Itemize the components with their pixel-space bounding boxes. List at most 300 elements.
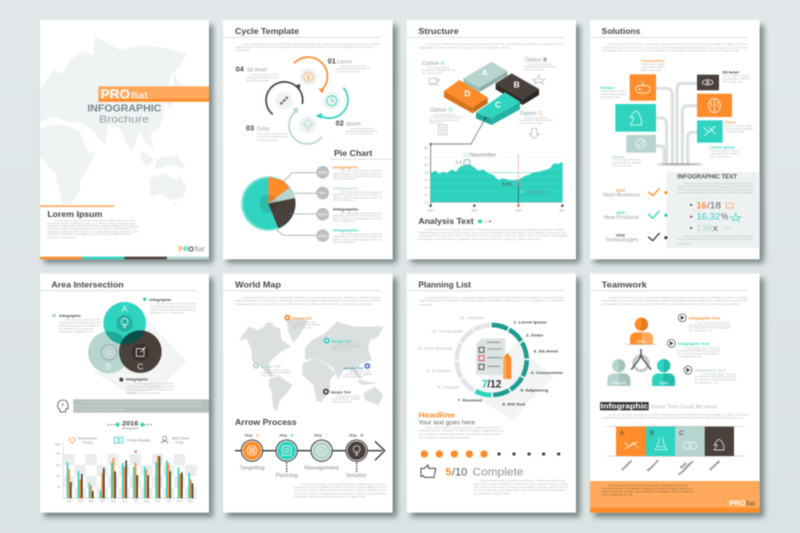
arrow process: Management (304, 465, 339, 471)
venn diagram: A (122, 304, 128, 314)
venn labels: eiusmod tempor incididunt ut (150, 308, 196, 312)
cover text block: occaecat cupidatat non proident sunt in culpa qui officia deserunt (47, 232, 133, 236)
panel: planning list (407, 273, 576, 513)
cycle labels: Lorem ipsum dolor sit amet (340, 64, 367, 68)
cycle labels: Sit Amet (247, 67, 267, 73)
bar chart: Sep (156, 499, 161, 503)
pie legends: adipiscing elit sed do eiusmod tempor ut (333, 193, 382, 197)
solution labels: elit sed do (600, 95, 621, 99)
cover logo: P (178, 247, 183, 254)
area chart: 0.3 (425, 185, 429, 189)
ring labels: 4. Consectetur (531, 370, 564, 375)
solution labels: consectetur adipis (722, 77, 750, 81)
team callouts (667, 314, 737, 385)
info panel text: tempor incididunt ut labore et dolore magna aliqua ut enim ad minim (677, 185, 754, 189)
option labels: consectetur adipiscing elit (429, 115, 462, 119)
map markers: consectetur adipis (331, 397, 361, 401)
panel: world map and arrow process (223, 273, 393, 513)
connector line (430, 117, 486, 206)
cover text block: mollit anim id est laborum (47, 235, 76, 239)
infographic heading: Some Text Could Be Here (651, 405, 717, 411)
timeline (603, 188, 669, 244)
team callouts: Infographic Text (694, 368, 726, 373)
intro text: magna aliqua ut enim ad minim veniam quis nostrud exercitation ullamco laboris nisi ut aliquip ex ea commodo (418, 299, 565, 303)
stats: 136 (696, 223, 712, 233)
bar chart: Nov (177, 499, 183, 503)
area chart: 1.0 (425, 155, 429, 159)
infographic heading (600, 402, 717, 411)
grey text band: Lorem ipsum dolor sit amet consectetur adipiscing elit sed do eiusmod tempor incididunt ut labore (82, 400, 202, 404)
grey text band: et dolore magna aliqua ut enim ad minim veniam quis nostrud exercitation ullamco laboris nisi ut aliquip (75, 403, 202, 407)
solution labels: Lorem ipsum dolor (641, 62, 665, 66)
ring labels: 11. Consequat (432, 329, 463, 334)
info panel text: commodo consequat duis aute irure dolor in reprehenderit in voluptate (677, 191, 754, 195)
complete text block: eiusmod tempor incididunt ut labore et dolore magna aliqua ut enim (474, 482, 569, 486)
tabs: D (708, 430, 713, 437)
bar chart: May (111, 499, 117, 503)
heading: structure: Structure (418, 26, 459, 36)
cycle labels: Dolor (257, 127, 270, 133)
pie legends: labore et dolore magna aliqua ut enim ad (333, 216, 382, 220)
arrow process: Planning (276, 473, 298, 479)
solution labels: elit sed do (710, 155, 731, 159)
bar chart: Feb (78, 499, 83, 503)
area chart: 0.4 (425, 178, 429, 182)
infographic text: Lorem ipsum dolor sit amet consectetur adipiscing elit sed do eiusmod tempor incididunt ut labore et dolore (608, 412, 748, 416)
team callouts: Lorem ipsum dolor sit amet (701, 372, 736, 376)
connector pipes (656, 83, 697, 164)
ring labels (417, 315, 564, 406)
cycle diagram (266, 57, 348, 144)
heading: arrow process: Arrow Process (235, 417, 297, 427)
orange footer: Lorem ipsum dolor sit amet consectetur adipiscing elit sed do (608, 483, 689, 487)
venn diagram: C (137, 361, 143, 371)
cycle labels: do eiusmod tempor ut (346, 132, 373, 136)
bar chart: 100 (56, 474, 61, 478)
headline block: Headline (418, 411, 455, 420)
rotated tab labels: Research (646, 459, 660, 472)
cover logo: flat (194, 247, 204, 254)
cycle labels: 03 (246, 124, 254, 133)
pie legends: adipiscing elit sed do eiusmod tempor ut (333, 235, 382, 239)
chart legend: Group (83, 441, 93, 445)
stats: </> (722, 226, 731, 232)
isometric blocks: A (482, 68, 489, 78)
bar chart: Mar (89, 499, 94, 503)
chart legend: SmartHeart (78, 437, 97, 441)
tabs: A (620, 430, 625, 437)
intro text: Lorem ipsum dolor sit amet consectetur adipiscing elit sed do eiusmod tempor incididunt ut labore et dolore (425, 42, 565, 46)
analysis text block: Lorem ipsum dolor sit amet consectetur adipiscing elit sed do eiusmod tempor incididunt ut labore et dolore (425, 228, 565, 232)
rotated tab labels: Best (679, 461, 688, 469)
venn labels: ut labore et dolore (59, 327, 95, 331)
map markers: elit sed do (343, 375, 364, 379)
venn labels: Lorem ipsum dolor sit amet (156, 302, 196, 306)
solution labels: elit sed do (722, 80, 743, 84)
ring long shadow (473, 342, 553, 422)
timeline: 2014 (616, 188, 626, 193)
pie legends: Infographic (333, 165, 358, 169)
heading: world map: World Map (235, 280, 281, 290)
intro text: consequat duis aute irure dolor in reprehenderit in voluptate velit esse cillum dolore eu fugiat nulla (602, 302, 739, 306)
cycle labels: do eiusmod tempor (257, 138, 278, 142)
venn labels: Infographic (59, 314, 81, 318)
chart legend (69, 436, 189, 445)
solution labels: Consectetur (641, 59, 666, 63)
headline block: nisi ut aliquip ex ea commodo consequat (418, 435, 470, 439)
map markers: Sample Text (261, 365, 281, 369)
progress value: /12 (487, 378, 501, 390)
panel: teamwork (590, 273, 760, 513)
pie legends: minim veniam quis (333, 219, 355, 223)
map markers: consectetur adipis (292, 323, 321, 327)
process text block: Lorem ipsum dolor sit amet consectetur adipiscing elit sed do (301, 482, 386, 486)
pie legends: Lorem ipsum dolor sit amet consectetur (340, 232, 382, 236)
pie legends: Lorem ipsum dolor sit amet consectetur (340, 169, 382, 173)
process text block: ex ea commodo consequat duis aute irure dolor in reprehenderit (294, 491, 387, 495)
venn labels: magna aliqua ut (59, 330, 93, 334)
cover world map (40, 37, 187, 207)
area chart: 1.1 (455, 159, 462, 164)
map markers (253, 315, 373, 403)
ring labels: 9. Et Dolore (427, 368, 452, 373)
pie legends: Lorem ipsum dolor sit amet consectetur (340, 211, 382, 215)
pie connectors (277, 173, 317, 235)
team callouts: consectetur adipiscing elit sed (694, 375, 737, 379)
solution labels: Lorem ipsum dolor (725, 124, 753, 128)
area chart: 1k (424, 146, 428, 150)
arrow process: B (291, 434, 294, 438)
map markers: Sample Text (343, 366, 364, 370)
ring labels: 3. Sit Amet (533, 349, 559, 354)
intro text: Lorem ipsum dolor sit amet consectetur adipiscing elit sed do eiusmod tempor incididunt ut labore et dolore (608, 42, 748, 46)
solution labels: consectetur adipis (725, 127, 754, 131)
heading: pie chart: Pie Chart (334, 149, 373, 158)
rotated tab labels: Possibilities (678, 460, 694, 476)
ring labels: 7. Eiusmod (458, 398, 483, 403)
bar chart: 50 (57, 485, 61, 489)
timeline: 2015 (616, 210, 626, 215)
process text block: ad minim veniam quis nostrud exercitation ullamco laboris nisi ut (294, 488, 387, 492)
option labels: Lorem ipsum dolor sit (528, 62, 552, 66)
cycle labels: 02 (336, 118, 344, 127)
arrow process: Step (279, 434, 288, 438)
map markers: elit sed do (331, 399, 352, 403)
intro text: Lorem ipsum dolor sit amet consectetur adipiscing elit sed do eiusmod tempor incididunt ut labore et dolore (242, 295, 381, 299)
pie legends: minim veniam quis (333, 198, 355, 202)
progress ring (457, 325, 527, 395)
ring labels: 1. Lorem Ipsum (513, 320, 547, 325)
pie legends: adipiscing elit sed do eiusmod tempor ut (333, 171, 382, 175)
stats: /18 (707, 200, 721, 210)
team callouts: do eiusmod tempor incididunt (694, 378, 736, 382)
cover text block: Lorem Ipsum (47, 210, 102, 219)
rotated tab labels: Analysis (620, 459, 633, 472)
map markers: elit sed do (331, 347, 352, 351)
map markers: Lorem ipsum dolor (336, 394, 360, 398)
cycle diagram: $ (307, 75, 311, 81)
tabs: C (679, 430, 684, 437)
map markers: consectetur adipis (261, 371, 291, 375)
complete text block: ad minim veniam quis nostrud exercitation ullamco laboris nisi ut (474, 485, 569, 489)
isometric blocks (444, 62, 539, 125)
icon: thumbs up (421, 465, 436, 477)
option labels: do eiusmod (422, 71, 442, 75)
arrow process: Step (349, 434, 358, 438)
intro text (602, 42, 748, 53)
solution labels (600, 59, 754, 168)
orange footer: flat (746, 500, 755, 507)
orange footer: PRO (729, 500, 746, 507)
venn labels: Infographic (126, 378, 148, 382)
venn labels: consectetur adipiscing elit sed (127, 384, 174, 388)
area chart: 2017 (559, 208, 566, 212)
cycle labels: Lorem (337, 59, 353, 65)
pie legends: minim veniam quis (333, 240, 355, 244)
intro text (602, 295, 748, 306)
stats (690, 200, 741, 233)
rotated tab labels (620, 457, 721, 476)
cover logo: R (183, 247, 188, 254)
solution labels: Tempor (600, 86, 616, 90)
intro text: magna aliqua ut enim ad minim veniam quis nostrud exercitation ullamco laboris nisi ut aliquip ex ea commodo (602, 299, 748, 303)
icon: head with question mark (58, 400, 68, 412)
cover colour strip (40, 257, 209, 259)
cover title: Brochure (99, 115, 149, 126)
pie value badges: 30% (318, 170, 327, 175)
pie legends (333, 165, 382, 244)
venn labels: eiusmod tempor incididunt ut (127, 387, 174, 391)
orange title band (98, 86, 209, 102)
info panel text: Lorem ipsum dolor sit amet consectetur adipiscing elit sed do eiusmod (683, 182, 754, 186)
area chart: January (526, 189, 547, 194)
venn labels: labore et dolore (150, 311, 184, 315)
cover text block: Lorem ipsum dolor sit amet consectetur adipiscing elit sed do (55, 219, 136, 223)
pie legends: labore et dolore magna aliqua ut enim ad (333, 237, 382, 241)
rotated tab labels: Strategy (708, 459, 721, 471)
process text block (294, 482, 388, 499)
option labels: consectetur adipiscing elit (422, 68, 455, 72)
option labels: B (543, 58, 547, 64)
complete text block: Lorem ipsum dolor sit amet consectetur adipiscing elit sed do (480, 479, 566, 483)
area chart (424, 146, 566, 212)
area chart: 0.2 (425, 193, 429, 197)
cycle labels: do eiusmod tempor (337, 69, 360, 73)
option labels: do eiusmod tempor ut (429, 118, 460, 122)
process text block: voluptate velit esse cillum dolore eu fugiat nulla (294, 495, 366, 499)
cover text block (47, 210, 139, 239)
map markers: consectetur adipis (343, 372, 373, 376)
chart legend: Best Town (172, 437, 189, 441)
cover title: PRO (101, 88, 130, 102)
headline block: Lorem ipsum dolor sit amet consectetur adipiscing elit sed do (425, 426, 502, 430)
orange footer: nisi ut aliquip ex ea (602, 493, 633, 497)
area chart: 0.8 (425, 163, 429, 167)
pie legends: adipiscing elit sed do eiusmod tempor ut (333, 214, 382, 218)
cover title: flat (131, 91, 148, 101)
stats: 16 (696, 200, 706, 210)
pie value badges (316, 166, 329, 242)
infographic text (602, 412, 748, 420)
solution labels: Aliqua (612, 155, 625, 159)
cover text block: voluptate velit esse cillum dolore eu fugiat nulla pariatur excepteur sint (47, 229, 138, 233)
solution labels: Lorem ipsum dolor (722, 74, 749, 78)
info panel text (677, 175, 754, 246)
solution labels: consectetur adipis (600, 92, 627, 96)
option labels: Lorem ipsum dolor sit (433, 112, 457, 116)
intro text (418, 42, 565, 49)
arrow process: Targeting (239, 466, 264, 472)
infographic heading: Infographic (601, 402, 649, 411)
intro text: magna aliqua ut enim ad minim veniam quis nostrud exercitation ullamco laboris nisi ut aliquip ex ea commodo (602, 45, 748, 49)
venn labels: Lorem ipsum dolor sit amet (133, 381, 174, 385)
cover title (87, 88, 161, 126)
map markers: elit sed do (292, 325, 313, 329)
cover text block: eiusmod tempor incididunt ut labore et dolore magna aliqua ut enim (47, 221, 137, 225)
map markers: Sample Text (292, 317, 313, 321)
map markers: Lorem ipsum dolor (336, 342, 361, 346)
orange footer: enim ad minim veniam quis nostrud exercitation ullamco laboris (602, 489, 694, 493)
intro text: consequat duis aute irure dolor in reprehenderit in voluptate velit esse cillum dolore eu fugiat nulla (602, 49, 739, 53)
team callouts: Infographic Text (689, 316, 721, 321)
area chart: 0.6 (425, 171, 429, 175)
timeline: New Products (604, 215, 639, 221)
intro text: Lorem ipsum dolor sit amet consectetur adipiscing elit sed do eiusmod tempor incididunt ut labore et dolore (608, 295, 748, 299)
progress dots (421, 450, 560, 458)
option labels: Option (430, 108, 447, 114)
cycle labels: 04 (236, 64, 245, 73)
complete text block (474, 479, 569, 496)
bar chart: 200 (56, 452, 61, 456)
venn labels (52, 298, 197, 395)
bar chart: 1000 (55, 442, 61, 446)
pie chart (241, 176, 296, 231)
ring labels: 12. Veniam (459, 315, 484, 320)
info panel text: veniam quis (677, 242, 691, 246)
venn labels: Lorem ipsum dolor sit amet (65, 318, 100, 322)
team callouts: Lorem ipsum dolor sit amet (684, 346, 720, 350)
solution labels: elit sed do (641, 68, 662, 72)
ring labels: 10. Quis Nostrud (417, 346, 453, 351)
option labels: Option (422, 61, 439, 67)
panel: area intersection (40, 273, 209, 513)
intro text: consequat (418, 302, 432, 306)
bar chart: Aug (144, 499, 149, 503)
bar chart: Jul (133, 499, 138, 503)
arrow process: D (361, 434, 364, 438)
area chart: November (470, 153, 497, 159)
map markers: Sample Text (331, 340, 352, 344)
venn labels: Infographic (149, 298, 171, 302)
pie value badges: 5% (319, 191, 326, 196)
bar chart: Jan (67, 499, 72, 503)
pie legends: Infographic (333, 187, 358, 191)
analysis text block: magna aliqua ut enim ad minim veniam quis nostrud exercitation ullamco laboris nisi ut aliquip ex ea commodo (418, 231, 567, 235)
isometric blocks: C (495, 99, 502, 109)
heading: teamwork: Teamwork (602, 280, 647, 290)
map markers: Lorem ipsum dolor (265, 368, 290, 372)
team callouts: consectetur adipiscing elit sed (678, 349, 720, 353)
heading: analysis text: Analysis Text (418, 216, 474, 226)
intro text: magna aliqua ut enim ad minim veniam quis nostrud exercitation ullamco (418, 45, 511, 49)
map markers: elit sed do (261, 373, 282, 377)
arrow process: Step (314, 434, 323, 438)
stats: % (721, 212, 728, 222)
intro text (235, 295, 381, 306)
cover title: INFOGRAPHIC (87, 104, 161, 115)
tabs: B (650, 430, 655, 437)
bar chart: Oct (166, 499, 171, 503)
complete text block: voluptate velit esse (474, 492, 511, 496)
bar chart: 150 (56, 463, 61, 467)
area chart: 2015 (471, 208, 478, 212)
pie legends: labore et dolore magna aliqua ut enim ad (333, 195, 382, 199)
chart legend: Photo Really (127, 439, 151, 443)
cover text block: ad minim veniam quis nostrud exercitation ullamco laboris nisi ut aliquip (47, 224, 139, 228)
solution labels: Lorem ipsum dolor (600, 89, 626, 93)
headline block: eiusmod tempor incididunt ut labore et dolore magna aliqua ut (418, 429, 504, 433)
venn labels: consectetur adipiscing elit sed do (150, 305, 197, 309)
cycle labels: consectetur adipiscing elit sed (346, 129, 378, 133)
area chart: 0.53 (502, 182, 512, 188)
cycle labels: 01 (328, 56, 336, 65)
ring labels: 8. Tempor (438, 385, 461, 390)
option labels: A (441, 61, 445, 67)
grey text band: ex ea commodo consequat duis aute (75, 407, 126, 411)
arrow process: A (256, 434, 259, 438)
report heading: Report (122, 426, 140, 431)
intro text (235, 42, 381, 52)
solution labels: elit sed do (725, 130, 746, 134)
solution labels: elit sed do (612, 164, 633, 168)
intro text: consequat duis aute irure dolor in reprehenderit in voluptate velit esse cillum dolore eu fugiat nulla (235, 302, 372, 306)
team callouts: consectetur adipiscing elit sed (689, 323, 731, 327)
analysis text block: consequat duis aute irure dolor in reprehenderit in voluptate velit esse cillum dolore eu fugiat nulla pariatur (418, 234, 568, 238)
tabs (603, 426, 747, 457)
area chart: 23 (463, 153, 469, 159)
solution labels: Lorem Ipsum (710, 145, 736, 149)
area chart: 0.1 (425, 200, 429, 204)
team callouts: do eiusmod tempor incididunt (689, 326, 731, 330)
isometric blocks: B (514, 80, 520, 90)
progress value: 7 (482, 378, 488, 390)
intro text: consequat (235, 48, 249, 52)
heading: solutions: Solutions (602, 26, 641, 36)
option labels: Option (525, 58, 542, 64)
map markers: consectetur adipis (331, 345, 362, 349)
analysis text block: excepteur sint occaecat cupidatat non proident sunt in culpa qui officia deserunt (418, 237, 542, 241)
pie value badges: 25% (318, 212, 327, 217)
team figures: Sam (659, 381, 669, 386)
cycle labels: consectetur adipiscing elit sed (246, 75, 279, 79)
venn labels: labore et dolore (127, 391, 161, 395)
arrow process (235, 434, 385, 479)
pie legends: labore et dolore magna aliqua ut enim ad (333, 174, 382, 178)
heading: cycle template: Cycle Template (235, 26, 299, 36)
progress value (482, 378, 501, 390)
solution labels: Door (725, 120, 736, 124)
cycle labels: Lorem ipsum dolor sit (350, 126, 374, 130)
analysis text block (418, 228, 568, 241)
isometric blocks: D (464, 89, 470, 99)
panel: cycle template and pie chart (223, 20, 393, 259)
headline block: Your text goes here (418, 420, 475, 427)
intro text: magna aliqua ut enim ad minim veniam quis nostrud exercitation ullamco laboris nisi ut aliquip ex ea commodo (235, 299, 381, 303)
team callouts: do eiusmod tempor incididunt (678, 352, 720, 356)
heading: area intersection: Area Intersection (51, 280, 124, 290)
team callouts: Infographic Text (678, 341, 710, 346)
bar chart: Jun (122, 499, 127, 503)
